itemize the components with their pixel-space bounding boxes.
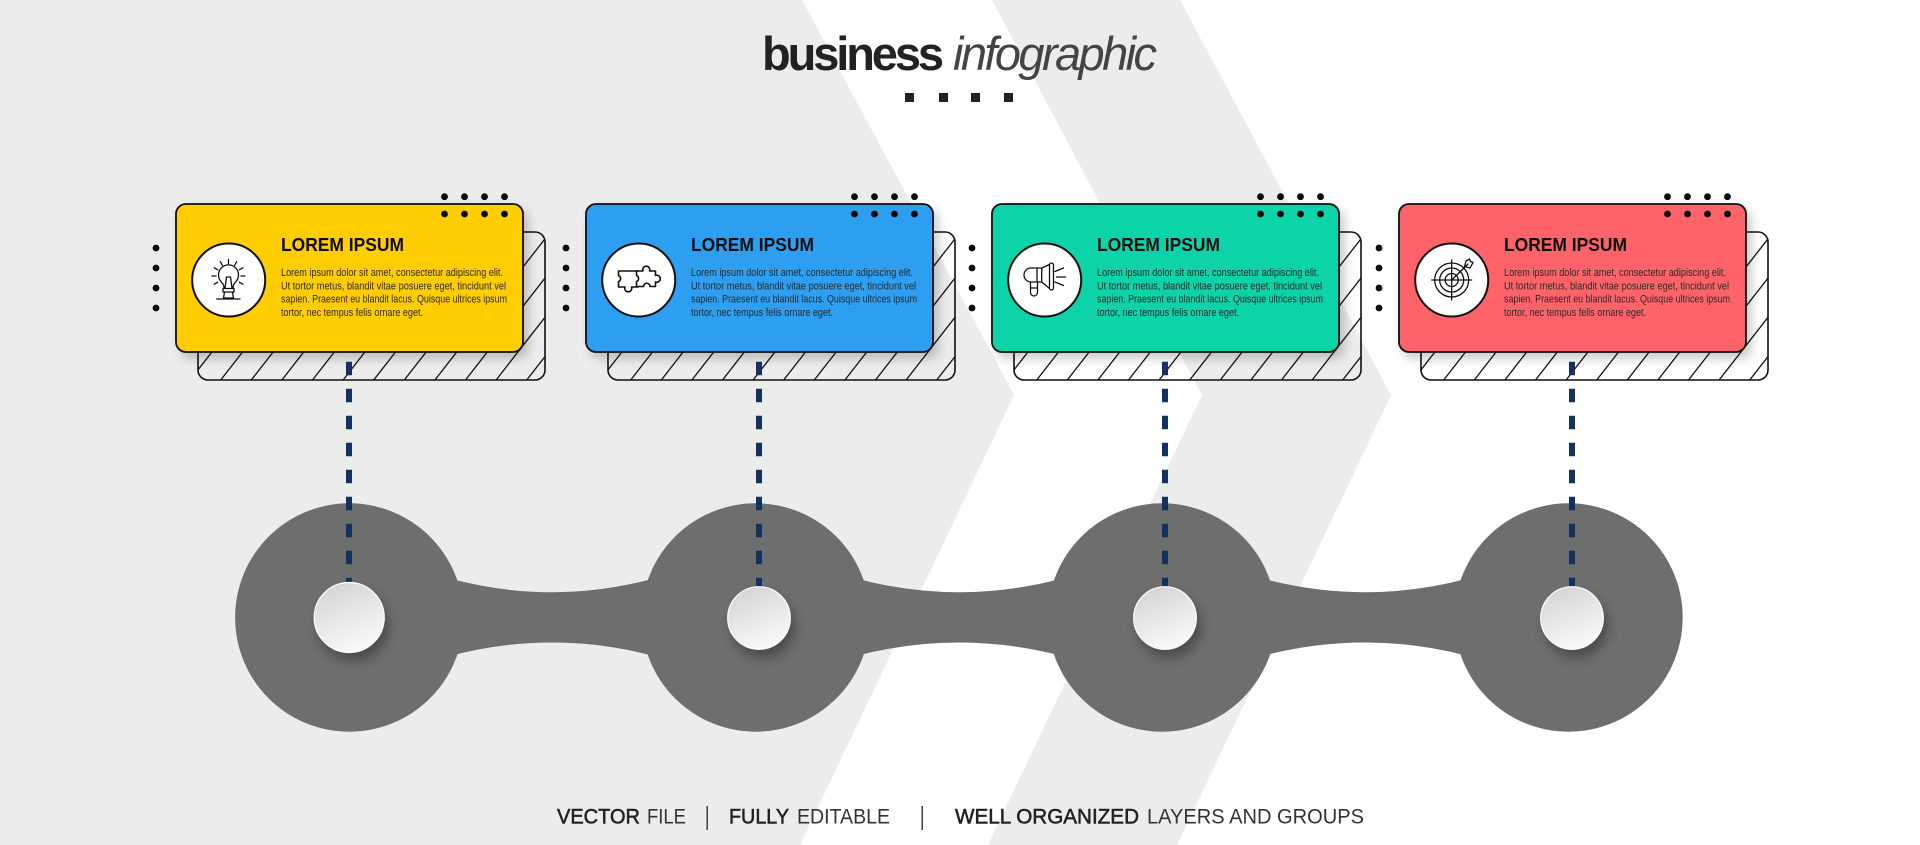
body text 1: tortor, nec tempus felis ornare eget.	[281, 307, 423, 319]
icon: target	[1415, 244, 1488, 316]
top dots 4	[1664, 193, 1731, 217]
title: business	[762, 27, 944, 80]
card 2: blue	[562, 193, 956, 381]
body text 4: Lorem ipsum dolor sit amet, consectetur adipiscing elit.	[1504, 267, 1726, 279]
footer tagline: FULLY	[729, 806, 789, 828]
card body 2	[586, 204, 933, 352]
left dots 3	[969, 245, 975, 311]
body text 4: tortor, nec tempus felis ornare eget.	[1504, 307, 1646, 319]
body text 1: sapien. Praesent eu blandit lacus. Quisque ultrices ipsum	[281, 294, 507, 306]
card 1: yellow	[152, 193, 546, 381]
icon: megaphone	[1008, 244, 1081, 316]
left dots 2	[563, 245, 569, 311]
dashed connector lines	[349, 362, 1572, 590]
body text 1: Ut tortor metus, blandit vitae posuere eget, tincidunt vel	[281, 280, 506, 292]
footer tagline: LAYERS AND GROUPS	[1147, 806, 1364, 828]
footer tagline	[557, 806, 1364, 830]
body text 1	[281, 267, 507, 319]
body text 3	[1097, 267, 1323, 319]
footer tagline: VECTOR	[557, 806, 640, 828]
card body 3	[992, 204, 1339, 352]
left dots 4	[1376, 245, 1382, 311]
body text 1: Lorem ipsum dolor sit amet, consectetur adipiscing elit.	[281, 267, 503, 279]
body text 2: sapien. Praesent eu blandit lacus. Quisque ultrices ipsum	[691, 294, 917, 306]
hatched back panel 1	[197, 231, 546, 381]
card 4: red	[1376, 193, 1769, 381]
hatched back panel 3	[1013, 231, 1362, 381]
timeline node discs	[314, 582, 1603, 652]
icon: puzzle	[602, 244, 675, 316]
card 3: green	[968, 193, 1362, 381]
icon: light bulb	[192, 244, 265, 316]
body text 2: tortor, nec tempus felis ornare eget.	[691, 307, 833, 319]
body text 3: Ut tortor metus, blandit vitae posuere eget, tincidunt vel	[1097, 280, 1322, 292]
title	[762, 27, 1157, 80]
footer tagline: WELL ORGANIZED	[955, 806, 1139, 828]
hatched back panel 4	[1420, 231, 1769, 381]
heading 1: LOREM IPSUM	[281, 234, 404, 255]
body text 4: Ut tortor metus, blandit vitae posuere eget, tincidunt vel	[1504, 280, 1729, 292]
top dots 2	[851, 193, 918, 217]
background chevrons	[0, 0, 1391, 845]
heading 3: LOREM IPSUM	[1097, 234, 1220, 255]
title: infographic	[953, 27, 1157, 80]
top dots 3	[1257, 193, 1324, 217]
top dots 1	[441, 193, 508, 217]
body text 3: Lorem ipsum dolor sit amet, consectetur adipiscing elit.	[1097, 267, 1319, 279]
body text 4: sapien. Praesent eu blandit lacus. Quisque ultrices ipsum	[1504, 294, 1730, 306]
card body 1	[176, 204, 523, 352]
card body 4	[1399, 204, 1746, 352]
left dots 1	[153, 245, 159, 311]
title square dots	[905, 93, 1013, 102]
body text 4	[1504, 267, 1730, 319]
body text 3: tortor, nec tempus felis ornare eget.	[1097, 307, 1239, 319]
heading 4: LOREM IPSUM	[1504, 234, 1627, 255]
body text 3: sapien. Praesent eu blandit lacus. Quisque ultrices ipsum	[1097, 294, 1323, 306]
body text 2	[691, 267, 917, 319]
footer tagline: FILE	[647, 806, 686, 828]
timeline blob	[235, 503, 1683, 732]
body text 2: Ut tortor metus, blandit vitae posuere eget, tincidunt vel	[691, 280, 916, 292]
heading 2: LOREM IPSUM	[691, 234, 814, 255]
hatched back panel 2	[607, 231, 956, 381]
footer tagline: EDITABLE	[797, 806, 890, 828]
body text 2: Lorem ipsum dolor sit amet, consectetur adipiscing elit.	[691, 267, 913, 279]
